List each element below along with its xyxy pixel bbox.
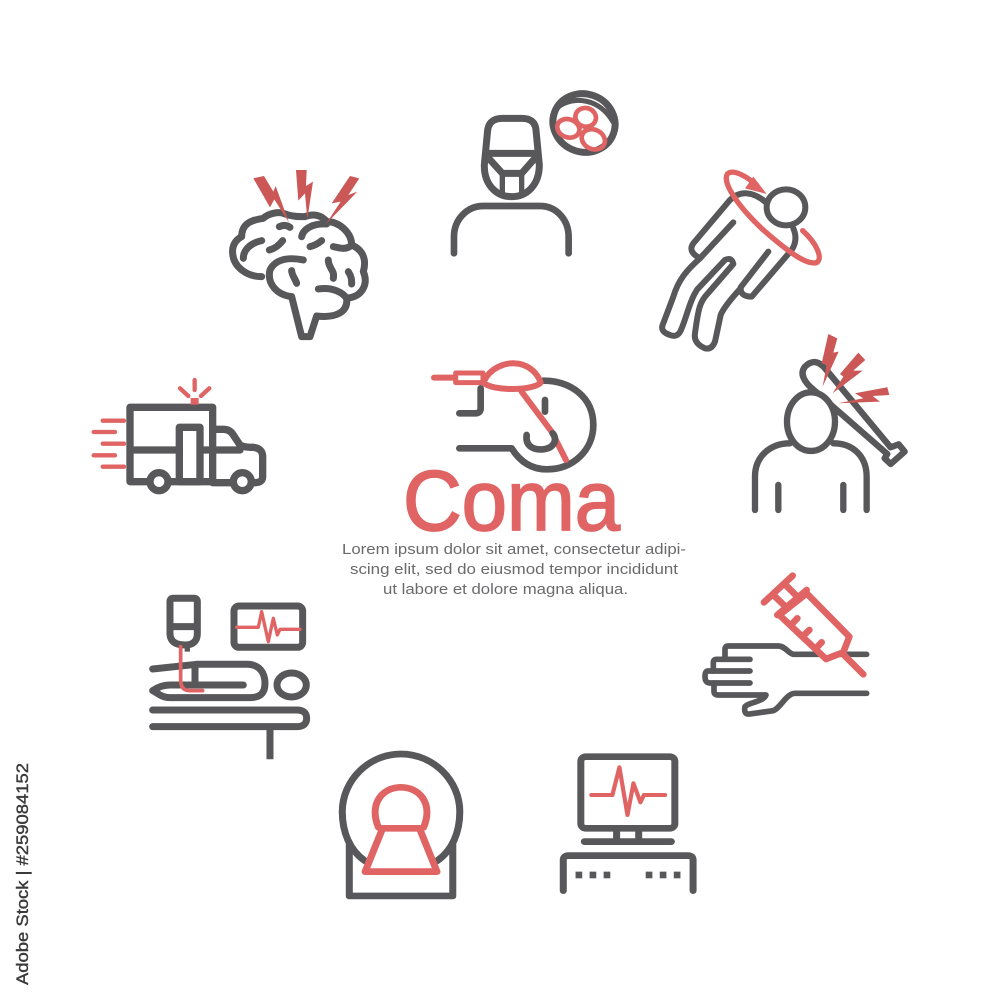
title: Coma (403, 454, 621, 549)
icon: patient in bed with IV and monitor (153, 598, 307, 759)
stock credit line: Adobe Stock | #259084152 (13, 763, 32, 985)
icon: MRI scanner (342, 754, 460, 896)
text block: description (342, 541, 686, 598)
icon: computer monitor with heartbeat (563, 757, 693, 891)
text block: description: Lorem ipsum dolor sit amet, consectetur adipi- (342, 541, 686, 558)
icon: head with surgical drill (434, 363, 593, 469)
text block: description: scing elit, sed do eiusmod tempor incididunt (350, 561, 679, 578)
icon: brain with lightning bolts (233, 170, 365, 337)
text block: description: ut labore et dolore magna aliqua. (383, 581, 628, 598)
icon: syringe injecting a hand (705, 576, 867, 714)
icon: ambulance (94, 380, 263, 491)
icon: person hit by baseball bat (755, 334, 905, 510)
icon: falling person with rotation arrow (662, 172, 819, 349)
icon: surgeon with operating lamp (454, 85, 623, 253)
